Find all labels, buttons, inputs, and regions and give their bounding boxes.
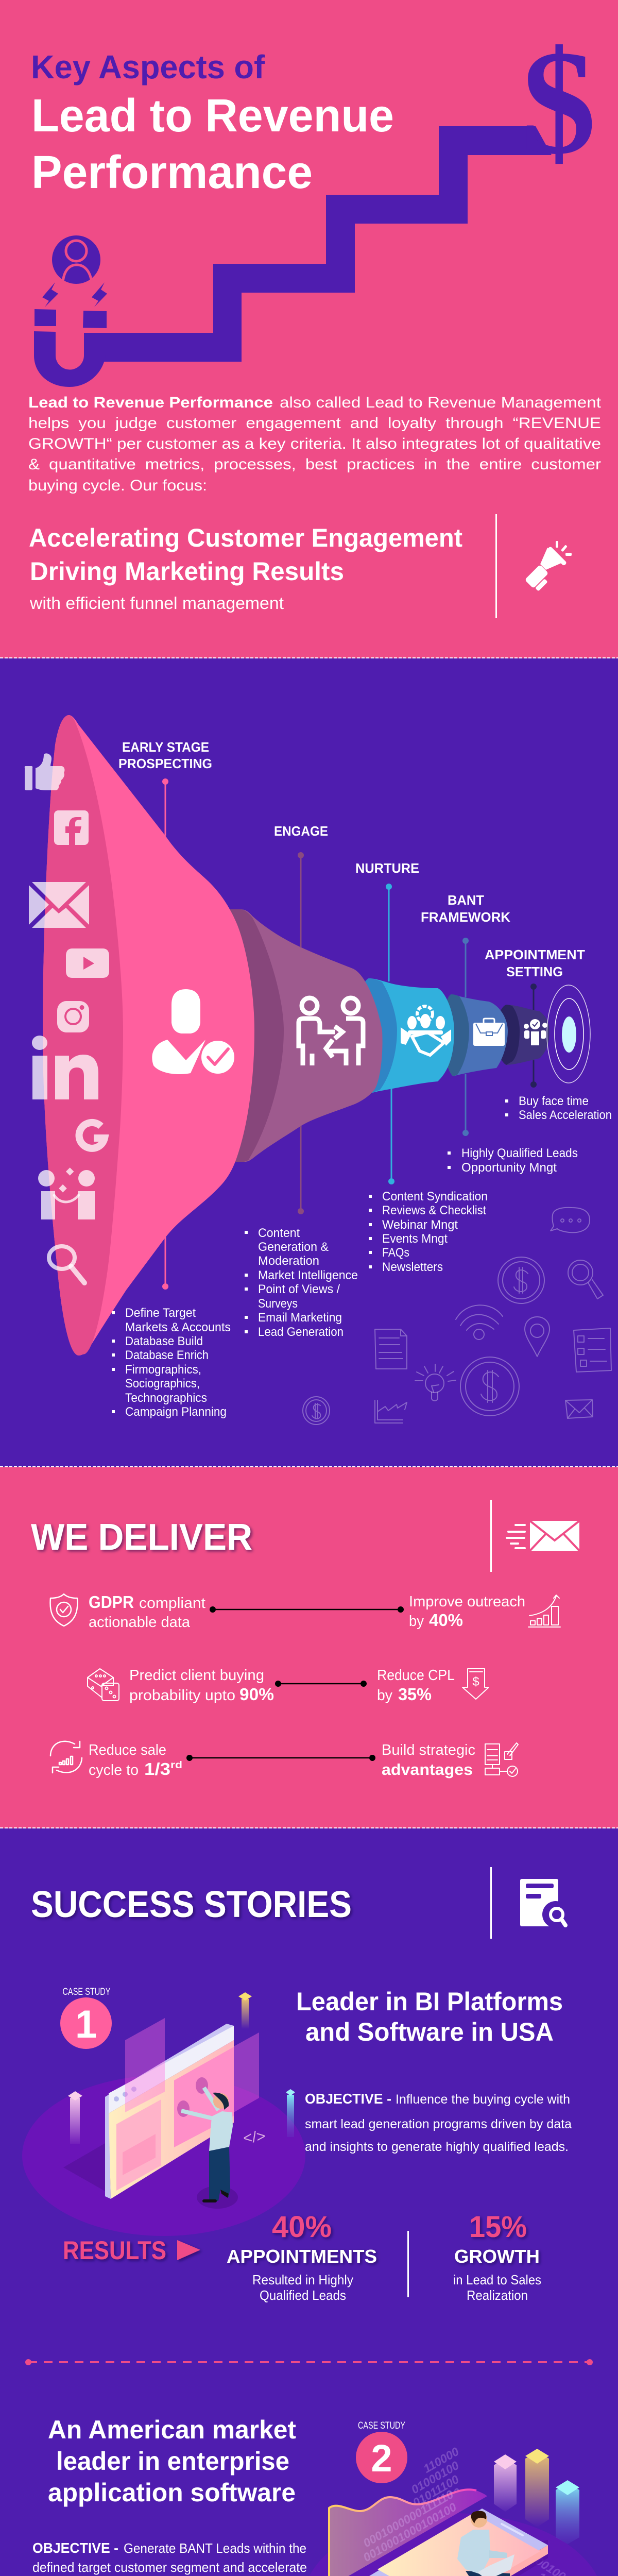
- list: nurture: Events Mngt: [382, 1232, 448, 1246]
- case study 1 badge: 1: [75, 2003, 97, 2046]
- we deliver heading: WE DELIVER: [31, 1517, 252, 1558]
- stat: 15% growth: 15%: [469, 2210, 527, 2244]
- list: BANT framework: Opportunity Mngt: [461, 1161, 557, 1175]
- panel: header background: [0, 0, 618, 658]
- label: early stage prospecting: EARLY STAGE: [122, 739, 209, 755]
- label: appointment setting: SETTING: [506, 964, 563, 979]
- icon: meetup people: [38, 1167, 95, 1219]
- icon: instagram: [57, 1001, 89, 1032]
- list: early stage prospecting: Firmographics,: [125, 1363, 201, 1377]
- title: Key Aspects of: [31, 48, 265, 86]
- stack: cyan: [286, 2089, 295, 2137]
- list: engage: Surveys: [258, 1297, 298, 1311]
- stage 3: nurture band: [355, 978, 454, 1093]
- title: Performance: [31, 147, 313, 198]
- list: nurture: FAQs: [382, 1246, 409, 1260]
- stack: yellow: [238, 1992, 252, 2029]
- stage 1: early stage prospecting band: [43, 715, 254, 1355]
- stair steps: [85, 126, 552, 362]
- icon: briefcase: [473, 1019, 505, 1046]
- intro paragraph: Lead to Revenue Performance: [28, 394, 273, 411]
- background doodle icons: [303, 1208, 611, 1425]
- intro paragraph: buying cycle. Our focus:: [28, 477, 207, 494]
- label: BANT framework: FRAMEWORK: [421, 909, 510, 925]
- icon: thumbs up: [25, 753, 64, 790]
- text: reduce CPL: Reduce CPL: [377, 1667, 455, 1684]
- focus heading: [29, 523, 462, 613]
- stat: 40% appointments: APPOINTMENTS: [227, 2246, 377, 2267]
- label: BANT framework: [421, 892, 510, 1136]
- text: reduce CPL: [377, 1667, 455, 1704]
- case study 1 objective: smart lead generation programs driven by data: [305, 2117, 572, 2131]
- list: early stage prospecting: [112, 1306, 231, 1419]
- stage 4: BANT framework band: [443, 994, 508, 1076]
- screen: [105, 2024, 234, 2199]
- code symbol: </>: [243, 2128, 266, 2147]
- stat: 15% growth: GROWTH: [454, 2246, 540, 2267]
- list: early stage prospecting: Database Build: [125, 1334, 203, 1348]
- lower binary digits on chart: 0001000000111110: [360, 2487, 456, 2550]
- case study 2 objective: Generate BANT Leads within the: [124, 2540, 306, 2556]
- label: engage: ENGAGE: [274, 823, 328, 839]
- case study 1 objective: Influence the buying cycle with: [396, 2092, 570, 2107]
- text: GDPR compliant: GDPR: [89, 1592, 134, 1612]
- focus heading: Accelerating Customer Engagement: [29, 523, 462, 552]
- case study 1 title: and Software in USA: [305, 2018, 554, 2046]
- icon: growth chart: [528, 1595, 560, 1627]
- upper binary digits: 01011100: [410, 2472, 461, 2510]
- connector: [186, 1755, 375, 1761]
- stage 2: engage band: [227, 909, 383, 1162]
- case study 2 title: leader in enterprise: [56, 2447, 289, 2476]
- case study 1 results: [63, 2210, 541, 2303]
- icon: two people exchanging: [299, 998, 363, 1065]
- stack: pink: [494, 2454, 517, 2512]
- stack: yellow: [525, 2449, 549, 2527]
- icon: youtube: [66, 948, 109, 978]
- focus heading: with efficient funnel management: [29, 594, 284, 613]
- delivery row 2: [88, 1667, 489, 1704]
- text: GDPR compliant: [89, 1592, 205, 1631]
- case study 2 badge: [356, 2420, 407, 2483]
- case study 2 badge: CASE STUDY: [358, 2420, 405, 2431]
- case study 1 title: [296, 1987, 563, 2046]
- phone platform: [367, 2509, 548, 2576]
- stack: cyan: [556, 2480, 579, 2544]
- list: appointment setting: [505, 1094, 612, 1122]
- intro paragraph: [28, 394, 602, 494]
- wave chart: [328, 2489, 487, 2576]
- upper binary digits: 01000100: [409, 2459, 461, 2497]
- stairs illustration: [34, 20, 596, 387]
- panel: funnel background: [0, 658, 618, 1467]
- icon: search: [49, 1246, 84, 1283]
- intro paragraph: & quantitative metrics, processes, best practices in the entire customer: [28, 456, 601, 473]
- stat: 15% growth: Realization: [467, 2287, 528, 2303]
- upper binary digits: 110000: [421, 2445, 461, 2476]
- list: early stage prospecting: Define Target: [125, 1306, 196, 1320]
- stat: 40% appointments: 40%: [272, 2210, 332, 2244]
- text: reduce CPL: by: [377, 1687, 392, 1704]
- list: engage: Market Intelligence: [258, 1268, 358, 1282]
- text: improve outreach: by: [409, 1613, 424, 1630]
- intro paragraph: GROWTH“ per customer as a key criteria. It also integrates lot of qualitative: [28, 435, 601, 452]
- panel: we deliver background: [0, 1467, 618, 1828]
- list: engage: [245, 1226, 358, 1339]
- list: early stage prospecting: Sociographics,: [125, 1377, 200, 1391]
- upper binary digits: 0110111110000: [386, 2485, 464, 2537]
- icon: dollar down arrow: $: [472, 1675, 479, 1689]
- list: engage: Email Marketing: [258, 1311, 342, 1325]
- results label: RESULTS: [63, 2236, 166, 2265]
- delivery row 1: [50, 1592, 560, 1631]
- list: BANT framework: Highly Qualified Leads: [461, 1146, 578, 1160]
- case study 2 objective: OBJECTIVE -: [32, 2540, 118, 2556]
- case study 1 objective: OBJECTIVE -: [305, 2091, 391, 2107]
- list: engage: Lead Generation: [258, 1325, 344, 1339]
- icon: facebook: [54, 810, 89, 845]
- delivery row 3: [50, 1741, 518, 1778]
- label: nurture: [355, 860, 419, 1184]
- text: reduce sale cycle: [89, 1742, 182, 1778]
- list: nurture: Reviews & Checklist: [382, 1204, 486, 1217]
- icon: lightning bolts: [42, 282, 107, 307]
- label: appointment setting: APPOINTMENT: [485, 947, 585, 962]
- icon: lead person: [52, 235, 100, 284]
- text: predict client buying: 90%: [239, 1685, 274, 1704]
- case study 1 badge: CASE STUDY: [63, 1987, 111, 1997]
- case study 1 badge: [60, 1987, 112, 2049]
- list: nurture: Content Syndication: [382, 1190, 488, 1204]
- text: reduce CPL: 35%: [398, 1685, 432, 1704]
- text: improve outreach: Improve outreach: [409, 1594, 525, 1610]
- label: nurture: NURTURE: [355, 860, 419, 876]
- icon: magnet: [34, 309, 107, 387]
- funnel chart: [25, 715, 590, 1355]
- icon: email: [29, 882, 89, 928]
- icon: dollar sign: $: [521, 20, 596, 185]
- list: engage: Moderation: [258, 1254, 319, 1268]
- label: appointment setting: [485, 947, 585, 1088]
- list: nurture: Newsletters: [382, 1260, 443, 1274]
- text: improve outreach: 40%: [429, 1611, 463, 1630]
- icon: document search: [520, 1879, 569, 1928]
- icon: shield: [50, 1594, 77, 1626]
- text: reduce sale cycle: Reduce sale: [89, 1742, 166, 1758]
- text: GDPR compliant: actionable data: [89, 1614, 191, 1631]
- lower binary digits on chart: 0010001000100100: [360, 2500, 459, 2564]
- social icons: [25, 753, 109, 1283]
- icon: team with check: [524, 1019, 547, 1045]
- list: early stage prospecting: Campaign Planning: [125, 1405, 227, 1419]
- icon: target: [547, 985, 590, 1083]
- text: build strategic advantages: Build strategic: [382, 1742, 475, 1758]
- intro paragraph: helps you judge customer engagement and loyalty through “REVENUE: [28, 415, 601, 432]
- label: early stage prospecting: [118, 739, 212, 1290]
- case study 2 badge: 2: [371, 2437, 392, 2480]
- stage 5: appointment setting band: [495, 1005, 550, 1065]
- text: build strategic advantages: advantages: [382, 1760, 473, 1778]
- text: predict client buying: [129, 1667, 274, 1704]
- stat: 40% appointments: Resulted in Highly: [252, 2272, 353, 2287]
- label: early stage prospecting: PROSPECTING: [118, 756, 212, 771]
- illustration: case study 2: [303, 2445, 604, 2576]
- list: early stage prospecting: Technographics: [125, 1391, 207, 1405]
- focus heading: Driving Marketing Results: [30, 557, 344, 586]
- case study 1 title: Leader in BI Platforms: [296, 1987, 563, 2016]
- case study 2 objective: [32, 2540, 307, 2576]
- text: predict client buying: probability upto: [129, 1687, 235, 1704]
- case study 2 title: [48, 2415, 296, 2507]
- panel: success stories background: [0, 1828, 618, 2576]
- stat: 15% growth: [453, 2210, 541, 2303]
- text: reduce sale cycle: rd: [170, 1760, 182, 1771]
- text: GDPR compliant: compliant: [139, 1595, 205, 1612]
- stack: pink: [68, 2091, 82, 2144]
- case study 1 objective: [305, 2091, 572, 2154]
- floating translucent panels: [125, 2018, 259, 2112]
- icon: linkedin: [32, 1036, 98, 1099]
- list: engage: Generation &: [258, 1240, 329, 1254]
- icon: strategy documents: [485, 1743, 518, 1776]
- icon: megaphone: [525, 541, 572, 591]
- list: BANT framework: [448, 1146, 578, 1175]
- case study 2 title: An American market: [48, 2415, 296, 2444]
- text: predict client buying: Predict client buying: [129, 1667, 264, 1684]
- icon: dollar down arrow: [462, 1669, 489, 1699]
- right binary digits: [511, 2554, 586, 2576]
- case study 1 objective: and insights to generate highly qualified leads.: [305, 2140, 569, 2154]
- list: early stage prospecting: Database Enrich: [125, 1348, 209, 1362]
- icon: handshake and gear: [401, 1006, 451, 1055]
- icon: fast email: [506, 1521, 579, 1551]
- text: improve outreach: [409, 1594, 525, 1630]
- list: engage: Content: [258, 1226, 300, 1240]
- success stories heading: SUCCESS STORIES: [31, 1884, 352, 1925]
- icon: cycle chart: [50, 1741, 82, 1773]
- connector: [210, 1606, 404, 1613]
- title: Lead to Revenue: [31, 90, 394, 142]
- text: reduce sale cycle: 1/3: [144, 1759, 170, 1778]
- intro paragraph: also called Lead to Revenue Management: [280, 394, 602, 411]
- stat: 15% growth: in Lead to Sales: [453, 2272, 541, 2287]
- stat: 40% appointments: Qualified Leads: [260, 2287, 346, 2303]
- list: appointment setting: Buy face time: [519, 1094, 589, 1108]
- list: appointment setting: Sales Acceleration: [519, 1108, 612, 1122]
- illustration: case study 1: [22, 1992, 305, 2236]
- case study 2 objective: defined target customer segment and accelerate: [32, 2560, 307, 2575]
- label: BANT framework: BANT: [448, 892, 484, 908]
- case study 2 title: application software: [48, 2478, 296, 2507]
- text: build strategic advantages: [382, 1742, 475, 1778]
- list: nurture: Webinar Mngt: [382, 1218, 458, 1232]
- list: nurture: [369, 1190, 488, 1274]
- label: engage: [274, 823, 328, 1214]
- connector: [275, 1681, 367, 1687]
- icon: business person with check: [152, 989, 235, 1075]
- upper binary digits: [386, 2445, 464, 2537]
- list: engage: Point of Views /: [258, 1282, 340, 1296]
- text: reduce sale cycle: cycle to: [89, 1762, 139, 1778]
- person with laptop: [457, 2511, 529, 2576]
- stat: 40% appointments: [227, 2210, 377, 2303]
- icon: dice: [88, 1669, 119, 1701]
- title: [31, 48, 394, 198]
- person touching screen: [177, 2077, 238, 2209]
- icon: google: [79, 1123, 105, 1148]
- list: early stage prospecting: Markets & Accounts: [125, 1320, 231, 1334]
